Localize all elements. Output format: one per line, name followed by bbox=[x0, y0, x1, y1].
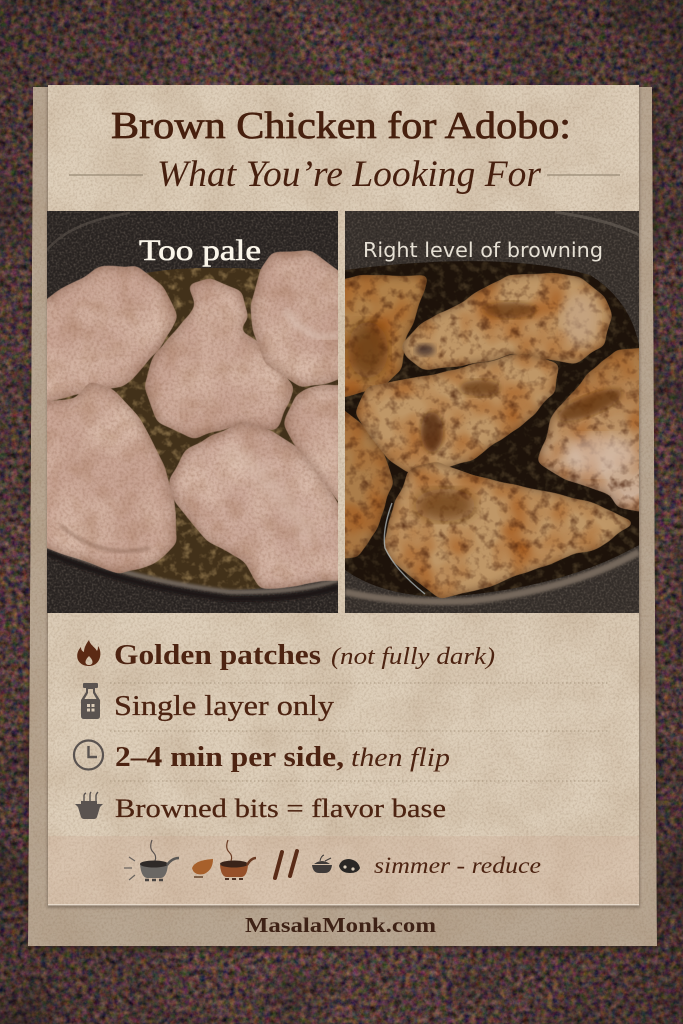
checklist panel bbox=[74, 639, 610, 823]
list item: browned bits: Browned bits = flavor base bbox=[115, 794, 446, 823]
icon: flame bbox=[77, 640, 100, 666]
icon: dark blob bbox=[339, 859, 360, 873]
heading: main title: Brown Chicken for Adobo: bbox=[111, 105, 571, 147]
list item: golden patches: Golden patches bbox=[114, 639, 321, 671]
chicken pieces, browned bbox=[330, 273, 648, 599]
chicken pieces, pale bbox=[35, 250, 348, 589]
icon: pan on heat bbox=[124, 840, 179, 880]
icon: brown bowl bbox=[192, 859, 213, 877]
icon: small covered pot bbox=[312, 855, 332, 873]
front paper card bbox=[47, 85, 640, 908]
list item: single layer: Single layer only bbox=[114, 690, 335, 722]
heading: too pale label: Too pale bbox=[139, 234, 261, 267]
icon: clock bbox=[74, 740, 103, 770]
panel: right level of browning photo bbox=[330, 211, 648, 613]
pan bbox=[47, 211, 338, 613]
icon: bottle bbox=[81, 683, 100, 719]
list item: timing: then flip bbox=[351, 743, 450, 772]
row dividers bbox=[110, 683, 610, 781]
list item: golden patches: (not fully dark) bbox=[331, 644, 495, 670]
footer brand: MasalaMonk.com bbox=[245, 913, 437, 937]
panel: too pale photo bbox=[35, 211, 348, 613]
pan bbox=[345, 211, 639, 613]
heading: subtitle: What You’re Looking For bbox=[157, 154, 542, 195]
icon: double slash bbox=[275, 851, 297, 878]
process strip bbox=[124, 840, 541, 880]
process strip label: simmer - reduce bbox=[374, 853, 541, 878]
back paper card bbox=[28, 87, 658, 949]
list item: timing: 2–4 min per side, bbox=[115, 742, 344, 773]
icon: browning pan bbox=[220, 840, 256, 879]
right level of browning label: Right level of browning bbox=[363, 238, 603, 262]
icon: steaming pot bbox=[75, 792, 103, 819]
